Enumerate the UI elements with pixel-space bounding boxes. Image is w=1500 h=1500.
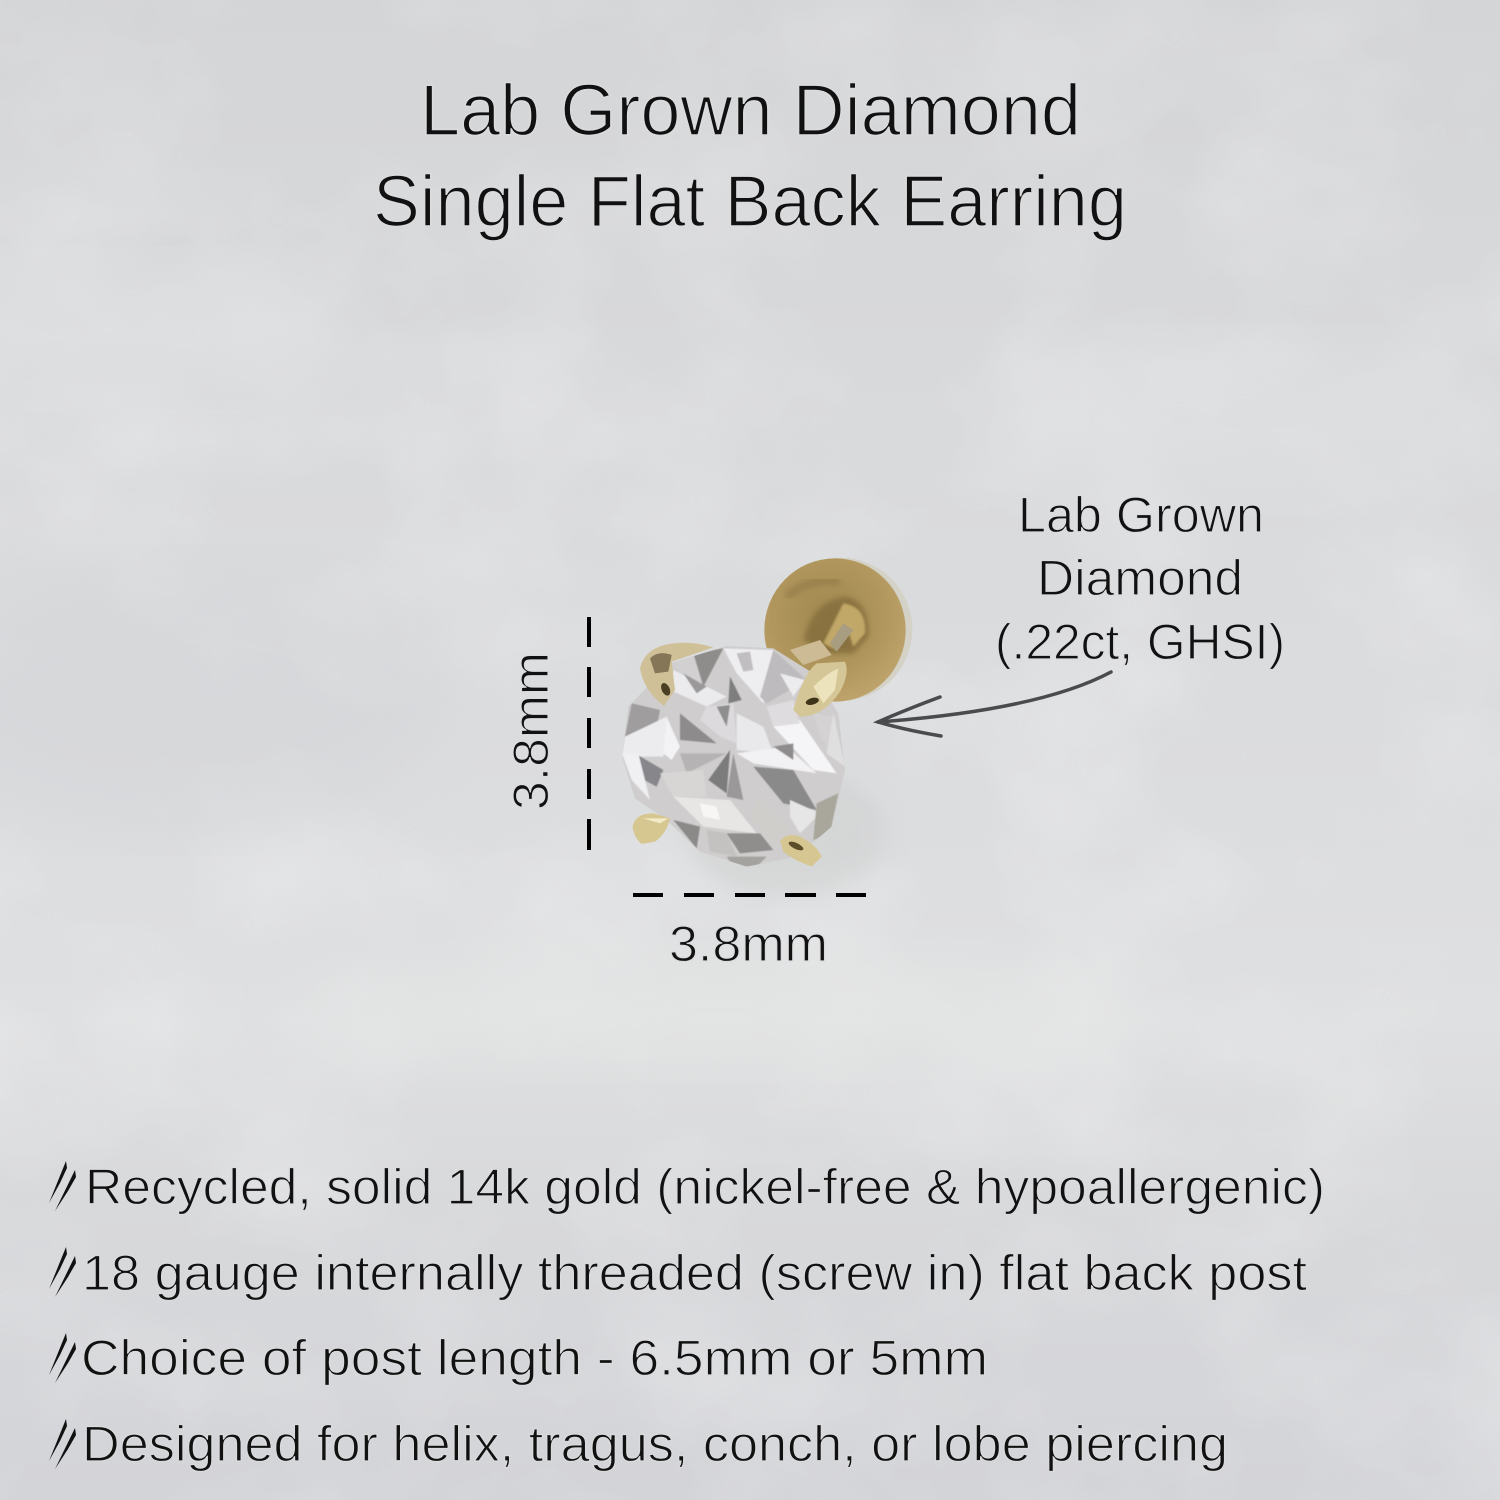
bullet 4: Designed for helix, tragus, conch, or lobe piercing (82, 1416, 1228, 1472)
icon: double slash (49, 1419, 76, 1469)
icon: double slash (49, 1247, 76, 1297)
arrow (878, 672, 1111, 736)
flat back disc (764, 558, 912, 702)
diamond (617, 640, 850, 873)
title (373, 71, 1127, 242)
horizontal dimension line (633, 893, 866, 897)
icon: double slash (49, 1333, 76, 1383)
callout: lab grown diamond: Diamond (1037, 550, 1243, 606)
shadow under earring (687, 770, 887, 897)
earring photo (617, 558, 912, 897)
callout: lab grown diamond: (.22ct, GHSI) (995, 614, 1285, 670)
title: Single Flat Back Earring (373, 162, 1127, 242)
icon: double slash (49, 1161, 76, 1211)
bullet 3: Choice of post length - 6.5mm or 5mm (81, 1330, 988, 1386)
callout: lab grown diamond: Lab Grown (1018, 487, 1264, 543)
bullet 2: 18 gauge internally threaded (screw in) flat back post (82, 1245, 1307, 1301)
prong bottom left (633, 813, 670, 844)
prong top left (640, 643, 713, 706)
title: Lab Grown Diamond (420, 71, 1081, 151)
prong top right (793, 662, 847, 717)
vertical dimension label: 3.8mm (503, 652, 559, 810)
vertical dimension line (587, 617, 591, 850)
bullet 1: Recycled, solid 14k gold (nickel-free & hypoallergenic) (85, 1159, 1325, 1215)
horizontal dimension label: 3.8mm (669, 916, 828, 972)
bullet list (49, 1159, 1325, 1472)
callout: lab grown diamond (995, 487, 1285, 670)
prong bottom right (780, 835, 822, 867)
